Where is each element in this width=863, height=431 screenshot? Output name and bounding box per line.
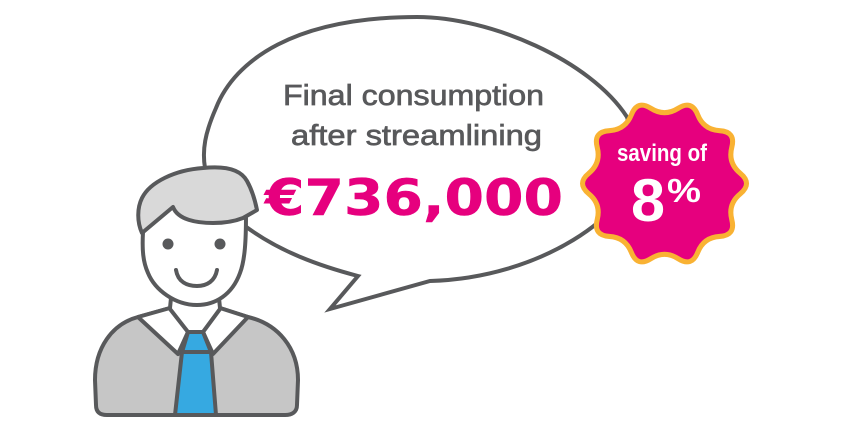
icon: businessman (95, 167, 298, 415)
amount: €736,000 (264, 169, 563, 227)
left eye (162, 238, 174, 250)
hair (138, 167, 257, 233)
badge (583, 105, 747, 262)
collar inner lines (170, 309, 220, 332)
heading: final consumption: Final consumption (283, 80, 544, 112)
collar (138, 298, 248, 354)
tie knot line (182, 350, 211, 354)
badge text: saving of: saving of (617, 140, 708, 167)
face (143, 195, 246, 305)
badge number: 8: 8 (631, 167, 665, 234)
smile (176, 270, 217, 286)
heading: after streamlining: after streamlining (291, 120, 542, 152)
necktie (175, 332, 216, 415)
badge percent sign: % (667, 172, 701, 209)
right eye (214, 238, 226, 250)
speech bubble (204, 17, 640, 309)
body (95, 308, 298, 415)
